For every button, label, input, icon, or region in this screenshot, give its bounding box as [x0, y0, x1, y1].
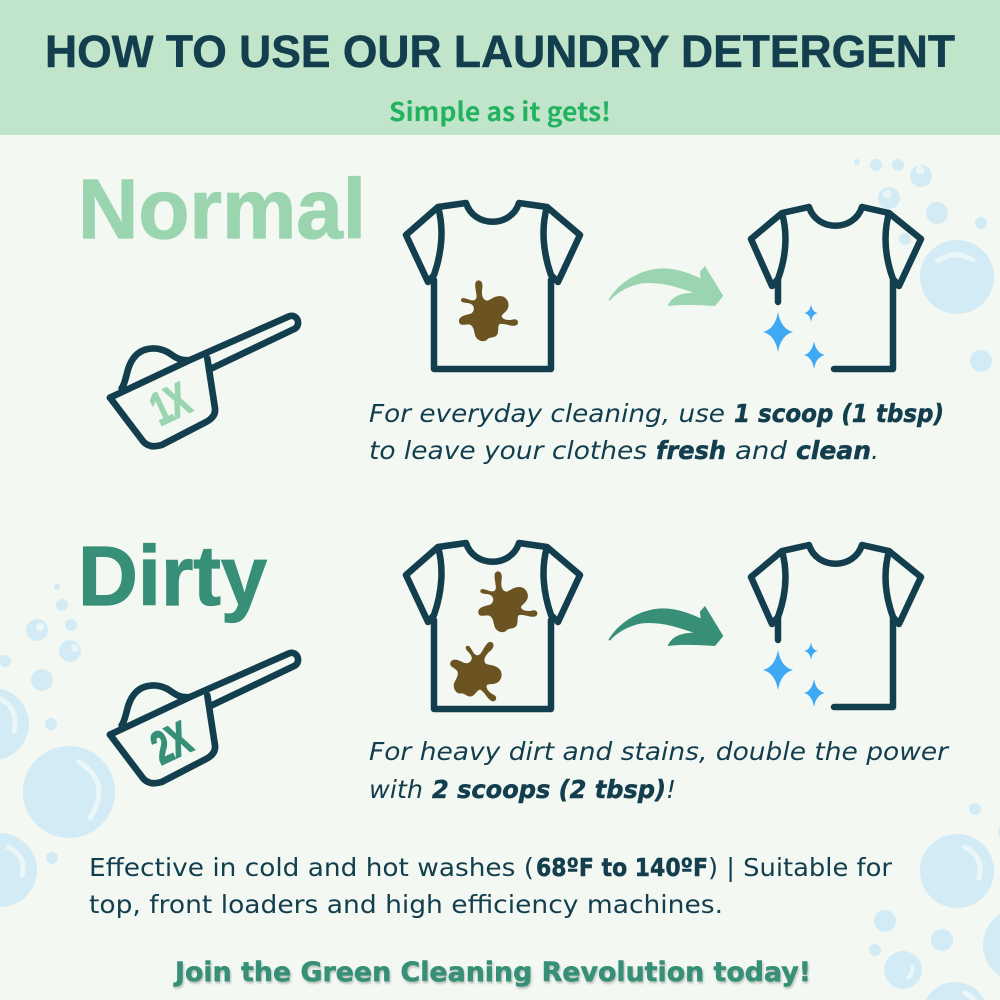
header band	[0, 0, 1000, 135]
label 2X: 2X	[144, 713, 199, 775]
arrow: normal	[608, 266, 723, 306]
bubbles: bottom right	[869, 803, 1000, 1000]
text: normal instructions	[369, 399, 944, 465]
call to action: Join the Green Cleaning Revolution today!	[173, 957, 811, 988]
heading: Dirty: Dirty	[78, 529, 267, 623]
heading: Normal: Normal	[78, 162, 366, 256]
stain	[459, 280, 518, 341]
text: dirty instructions: !	[666, 775, 676, 804]
icon: clean shirt (normal)	[751, 207, 921, 369]
text: normal instructions: 1 scoop (1 tbsp)	[734, 399, 944, 428]
bubbles: top right	[854, 159, 994, 372]
icon: scoop 2X	[110, 653, 298, 783]
title: HOW TO USE OUR LAUNDRY DETERGENT	[45, 26, 955, 77]
text: normal instructions: clean	[796, 436, 871, 465]
text: dirty instructions	[369, 737, 950, 804]
icon: stained shirt (dirty)	[406, 543, 580, 715]
text: dirty instructions: with	[369, 775, 423, 804]
text: normal instructions: For everyday cleaning, use	[369, 399, 725, 428]
text: normal instructions: fresh	[656, 436, 726, 465]
stain lower	[438, 630, 523, 715]
text: normal instructions: .	[871, 436, 879, 465]
icon: clean shirt (dirty)	[751, 545, 921, 707]
subtitle: Simple as it gets!	[389, 92, 611, 129]
bubbles: left	[0, 584, 115, 907]
stain upper	[478, 571, 537, 632]
icon: stained shirt (normal)	[406, 203, 580, 369]
sparkles	[763, 642, 825, 707]
text: temperature and machine note: ) | Suitable for	[708, 853, 893, 882]
text: dirty instructions: For heavy dirt and stains, double the power	[369, 737, 950, 766]
text: temperature and machine note: top, front loaders and high efficiency machines.	[89, 890, 723, 919]
text: dirty instructions: 2 scoops (2 tbsp)	[432, 775, 666, 804]
text: temperature and machine note: Effective in cold and hot washes (	[89, 853, 534, 882]
icon: scoop 1X	[110, 316, 298, 446]
label 1X: 1X	[143, 374, 198, 436]
text: normal instructions: to leave your clothes	[369, 436, 647, 465]
text: temperature and machine note	[89, 853, 893, 919]
text: normal instructions: and	[735, 436, 787, 465]
sparkles	[763, 304, 825, 369]
arrow: dirty	[608, 606, 723, 646]
text: temperature and machine note: 68ºF to 140ºF	[536, 853, 708, 882]
